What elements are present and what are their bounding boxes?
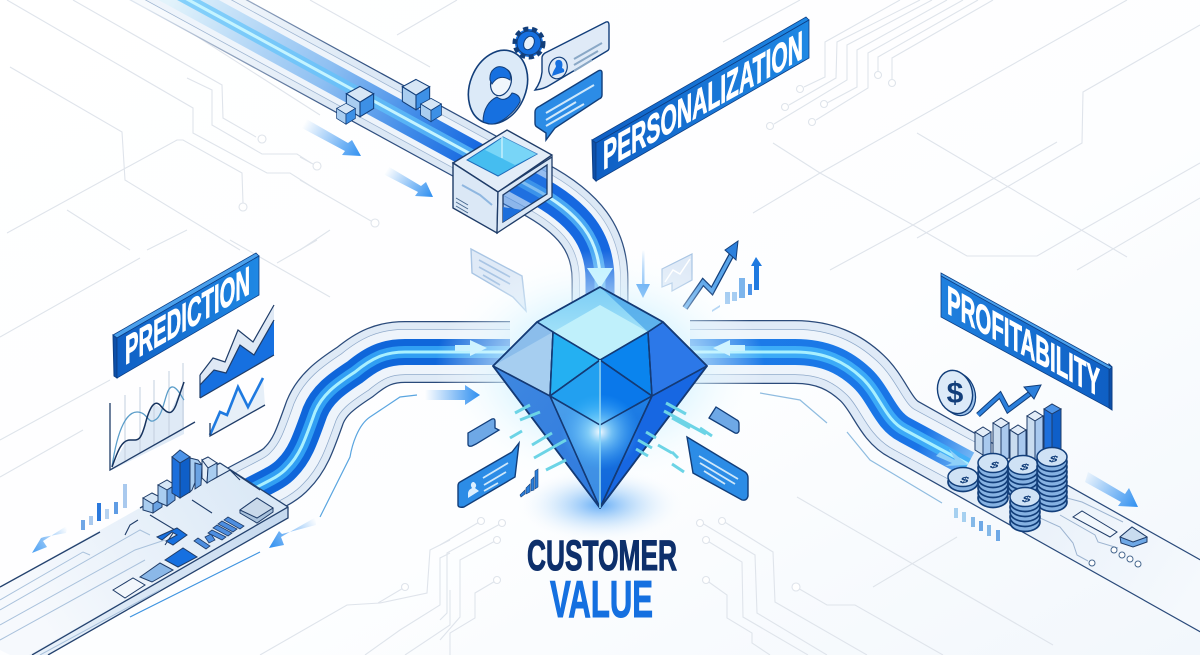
title: CUSTOMER VALUE [527, 532, 677, 629]
title line 1: CUSTOMER [527, 532, 677, 580]
arrow: down arrow beside channel [636, 250, 650, 298]
data dashes around diamond [510, 403, 712, 472]
icon: diamond [493, 287, 707, 508]
label: PERSONALIZATION sign [592, 17, 809, 181]
icon: profile speech bubble [535, 22, 609, 90]
icon: flow arrow in left channel [455, 340, 487, 356]
icon: flow arrows in right channel [713, 340, 968, 466]
side traces along channels [130, 393, 942, 617]
isometric bars on platform [143, 450, 217, 513]
label: PREDICTION sign: PREDICTION [125, 258, 250, 374]
label: PROFITABILITY sign [941, 273, 1112, 410]
chart: profitability bars [975, 404, 1061, 465]
gear [515, 29, 543, 57]
icon: gateway box on top channel [453, 130, 552, 233]
icon: blue message bubble [535, 70, 602, 140]
right platform details [956, 498, 1147, 567]
outlined tile [1073, 511, 1117, 537]
pipeline: right channel to profitability [690, 340, 1200, 635]
mini bar chart [81, 484, 127, 530]
icon: faded speech note top left of diamond [471, 249, 526, 311]
arrow: flow arrow below left channel [425, 385, 480, 405]
arrow: profit trend arrow [978, 385, 1041, 415]
icon: cubes on top channel [337, 79, 441, 124]
label: PREDICTION sign [113, 253, 259, 378]
halo under diamond [515, 467, 685, 543]
chart: stacked area chart [200, 305, 274, 398]
single coin: $ [958, 475, 971, 485]
arrow: return arrow below platform [269, 517, 316, 548]
icon: user avatar with gear [458, 29, 543, 133]
icon: dollar coin [932, 366, 981, 420]
icon: message bubble right of diamond [687, 437, 748, 500]
arrow: outbound arrow right platform [1085, 472, 1138, 507]
icon: mini bars left of diamond [520, 469, 538, 497]
title line 2: VALUE [550, 571, 653, 629]
icon: profile bubble left of diamond [458, 443, 519, 507]
arrow: upper left flow arrow 2 [383, 165, 433, 197]
icon: small card left of diamond [468, 419, 499, 446]
icon: coin stacks [948, 448, 1067, 532]
pipeline: top channel from upper left [130, 0, 613, 310]
coin stack two: $ [1018, 462, 1031, 472]
glow behind diamond [435, 250, 765, 490]
icon: growth arrow with bars [685, 241, 762, 312]
panel tiles [113, 528, 197, 598]
icon: small card right of diamond [709, 407, 739, 433]
arrow: outbound arrow left platform [32, 525, 68, 553]
chart: zigzag line chart [210, 378, 265, 436]
arrow: upper left flow arrow 1 [300, 117, 361, 156]
chip [1120, 527, 1147, 547]
dots row [1089, 547, 1141, 567]
coin stack three: $ [1047, 454, 1060, 464]
chart: line chart with area [110, 363, 195, 470]
icon: faded mini chart card [662, 254, 692, 291]
avatar [458, 41, 538, 133]
panel: left data platform [0, 463, 288, 655]
bar stripes [194, 517, 244, 549]
coin stack front: $ [1020, 494, 1033, 504]
icon: flow arrow in top channel [587, 268, 613, 288]
pipeline: left channel to diamond [240, 340, 510, 496]
icon: dollar coin: $ [947, 377, 964, 410]
dashed tick row [956, 508, 998, 541]
coin stack one: $ [988, 460, 1001, 470]
chip [240, 498, 273, 523]
